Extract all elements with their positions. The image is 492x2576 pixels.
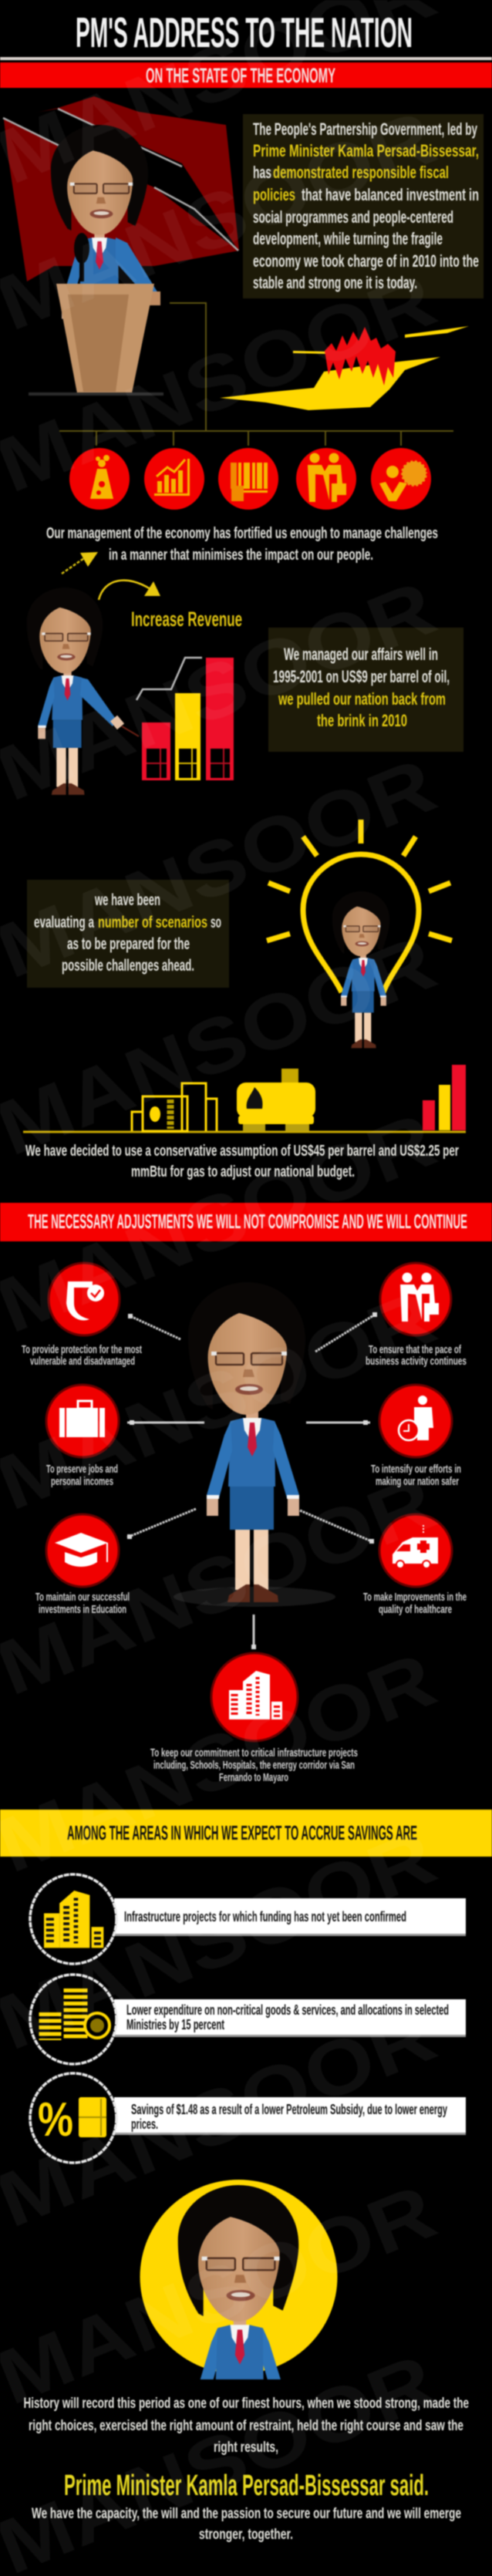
caption: To provide protection for the most — [22, 1343, 142, 1356]
caption: To maintain our successful — [35, 1591, 130, 1604]
goal: preserve jobs and incomes — [46, 1385, 119, 1488]
text panel: evaluating scenarios: evaluating a — [34, 914, 94, 931]
banner: areas of savings — [0, 1810, 492, 1857]
caption: personal incomes — [51, 1475, 113, 1488]
icon: buildings — [211, 1653, 298, 1741]
saving text: Ministries by 15 percent — [126, 2017, 224, 2032]
goal: intensify efforts at safety — [371, 1385, 461, 1488]
caption — [22, 1343, 142, 1368]
goal: quality of healthcare — [363, 1514, 467, 1616]
icon: percent and oil barrel: % — [38, 2093, 73, 2147]
bar chart: revenue — [136, 658, 234, 780]
saving 1: infrastructure projects — [30, 1874, 466, 1964]
caption: investments in Education — [39, 1603, 126, 1616]
saving text — [126, 2002, 449, 2032]
statement: conservative assumption — [25, 1143, 459, 1180]
closing line: stronger, together. — [199, 2527, 293, 2543]
icon: person and globe — [371, 448, 431, 510]
icon: graduation cap — [46, 1514, 119, 1587]
caption — [35, 1591, 130, 1616]
caption — [371, 1463, 461, 1488]
icon: growth chart — [144, 448, 204, 510]
arrow: dashed yellow up — [62, 552, 98, 574]
central figure: prime minister — [174, 1282, 335, 1607]
connector lines to icons — [59, 303, 453, 446]
caption: quality of healthcare — [379, 1603, 452, 1616]
arrow: curved yellow — [99, 581, 160, 600]
text panel: managed our affairs — [268, 628, 463, 752]
caption: vulnerable and disadvantaged — [30, 1355, 135, 1368]
icon: doctor and clock — [379, 1385, 452, 1457]
banner: on the state of the economy — [0, 57, 492, 88]
mini bar chart — [423, 1065, 466, 1130]
icon: oil derrick — [69, 448, 130, 510]
caption: including, Schools, Hospitals, the energy corridor via San — [153, 1759, 355, 1772]
intro text panel: policies — [253, 185, 295, 204]
text panel: evaluating scenarios: as to be prepared for the — [67, 935, 190, 953]
text panel: evaluating scenarios: so — [211, 914, 221, 931]
text panel: evaluating scenarios: number of scenarios — [98, 914, 207, 931]
goal: critical infrastructure — [150, 1653, 358, 1784]
text panel: evaluating scenarios: possible challenges ahead. — [62, 957, 194, 975]
flag of Trinidad and Tobago — [3, 96, 239, 281]
icon: business people — [380, 1263, 451, 1335]
goal: pace of business activity — [366, 1263, 467, 1368]
statement: management of the economy — [46, 525, 438, 564]
icon: percent and oil barrel — [30, 2073, 116, 2163]
icon: coins — [30, 1975, 116, 2064]
caption: To keep our commitment to critical infrastructure projects — [150, 1746, 358, 1759]
portrait of prime minister in yellow circle — [139, 2179, 339, 2380]
caption: Fernando to Mayaro — [219, 1771, 288, 1784]
goal: protection for the vulnerable — [22, 1263, 142, 1368]
heading: increase revenue: Increase Revenue — [131, 608, 242, 631]
banner: necessary adjustments — [0, 1203, 492, 1241]
caption — [366, 1343, 467, 1368]
lightbulb with prime minister — [267, 820, 452, 1048]
intro text panel: has — [253, 163, 271, 182]
icon: handshake — [296, 448, 356, 510]
prime minister at podium — [29, 125, 163, 396]
icon row — [69, 448, 431, 510]
saving 2: lower expenditure — [30, 1975, 466, 2064]
icon: yellow buildings — [30, 1874, 116, 1964]
icon: briefcase — [46, 1385, 119, 1457]
map of Trinidad with flames — [220, 326, 469, 410]
caption — [363, 1591, 467, 1616]
caption: To preserve jobs and — [46, 1463, 118, 1476]
arrows from figure to goals — [127, 1312, 377, 1649]
saving text: prices. — [131, 2116, 158, 2132]
banner text: ON THE STATE OF THE ECONOMY — [146, 64, 335, 87]
closing line — [32, 2506, 461, 2543]
closing statement — [23, 2396, 469, 2456]
text panel: managed our affairs: the brink in 2010 — [317, 711, 407, 730]
text panel: evaluating scenarios: we have been — [94, 891, 160, 909]
prime minister pointing — [27, 588, 139, 795]
icon: gas plant — [132, 1083, 217, 1131]
icon: ambulance — [379, 1514, 452, 1587]
closing statement: right results, — [214, 2440, 278, 2456]
caption — [46, 1463, 118, 1488]
energy illustration: plant, tank, bars — [23, 1065, 466, 1132]
saving 3: petroleum subsidy — [30, 2073, 466, 2163]
statement: conservative assumption: mmBtu for gas to adjust our national budget. — [131, 1163, 355, 1180]
goal: investments in education — [35, 1514, 130, 1616]
icon: fuel tank — [237, 1069, 315, 1131]
icon: barcode — [218, 448, 278, 510]
icon: shield with check — [49, 1263, 120, 1335]
caption — [150, 1746, 358, 1784]
text panel: evaluating scenarios — [27, 880, 229, 988]
saving text — [131, 2102, 447, 2132]
statement: management of the economy: in a manner that minimises the impact on our people. — [109, 547, 373, 564]
intro text panel — [243, 114, 484, 298]
